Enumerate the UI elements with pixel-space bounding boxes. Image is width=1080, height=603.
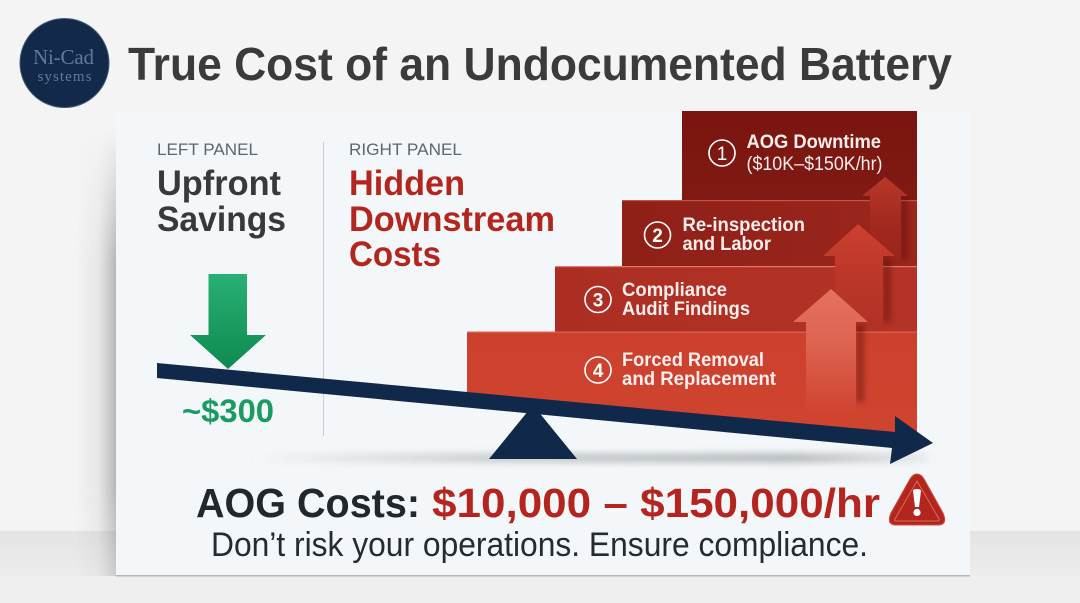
step 4: forced removal: Forced Removal bbox=[622, 350, 764, 371]
logo: Ni-Cad systems bbox=[20, 18, 109, 108]
step 2: re-inspection: Re-inspection bbox=[682, 215, 805, 236]
arrow: middle bbox=[823, 224, 895, 325]
step 3: compliance: Audit Findings bbox=[622, 299, 750, 320]
step 4: forced removal: and Replacement bbox=[622, 369, 777, 390]
step 1: AOG downtime: 1 bbox=[717, 144, 727, 165]
panel: left heading: Upfront bbox=[157, 164, 281, 203]
panel: right heading: RIGHT PANEL bbox=[349, 140, 462, 159]
logo: Ni-Cad systems: systems bbox=[38, 69, 92, 85]
AOG cost headline: $10,000 – $150,000/hr bbox=[432, 480, 880, 526]
panel: right heading: Costs bbox=[349, 235, 441, 274]
rising arrows bbox=[793, 177, 908, 412]
step 4: forced removal: 4 bbox=[593, 361, 604, 382]
panel: main card bbox=[76, 111, 970, 576]
staircase of hidden costs bbox=[467, 111, 917, 440]
logo: Ni-Cad systems: Ni-Cad bbox=[33, 45, 94, 69]
panel: right heading: Hidden bbox=[349, 164, 465, 203]
step 3: compliance: 3 bbox=[593, 290, 603, 312]
panel: right heading bbox=[349, 140, 555, 274]
step 1: AOG downtime: ($10K–$150K/hr) bbox=[746, 154, 882, 175]
arrow: top bbox=[862, 177, 908, 265]
savings amount: ~$300 bbox=[182, 393, 274, 429]
title: True Cost of an Undocumented Battery bbox=[128, 38, 952, 90]
step 3: compliance bbox=[555, 266, 917, 332]
icon: green down arrow bbox=[190, 274, 266, 369]
step 4: forced removal bbox=[467, 332, 917, 440]
step 3: compliance: Compliance bbox=[622, 280, 727, 301]
icon: warning triangle bbox=[889, 474, 945, 525]
seesaw fulcrum bbox=[489, 405, 577, 459]
step 1: AOG downtime bbox=[682, 111, 917, 201]
step 2: re-inspection: 2 bbox=[652, 226, 663, 247]
step 2: re-inspection: and Labor bbox=[682, 234, 772, 255]
AOG cost headline: AOG Costs: bbox=[196, 480, 420, 526]
panel: left heading bbox=[157, 140, 286, 239]
tagline: Don’t risk your operations. Ensure compliance. bbox=[211, 526, 868, 564]
step 2: re-inspection bbox=[622, 200, 917, 266]
panel: left heading: Savings bbox=[157, 200, 286, 239]
panel: left heading: LEFT PANEL bbox=[157, 140, 258, 159]
ground shadow bbox=[250, 453, 930, 463]
panel: right heading: Downstream bbox=[349, 200, 555, 239]
step 1: AOG downtime: AOG Downtime bbox=[746, 132, 881, 153]
divider between panels bbox=[323, 142, 324, 436]
arrow: bottom bbox=[793, 289, 868, 412]
seesaw beam arrow bbox=[157, 363, 933, 464]
